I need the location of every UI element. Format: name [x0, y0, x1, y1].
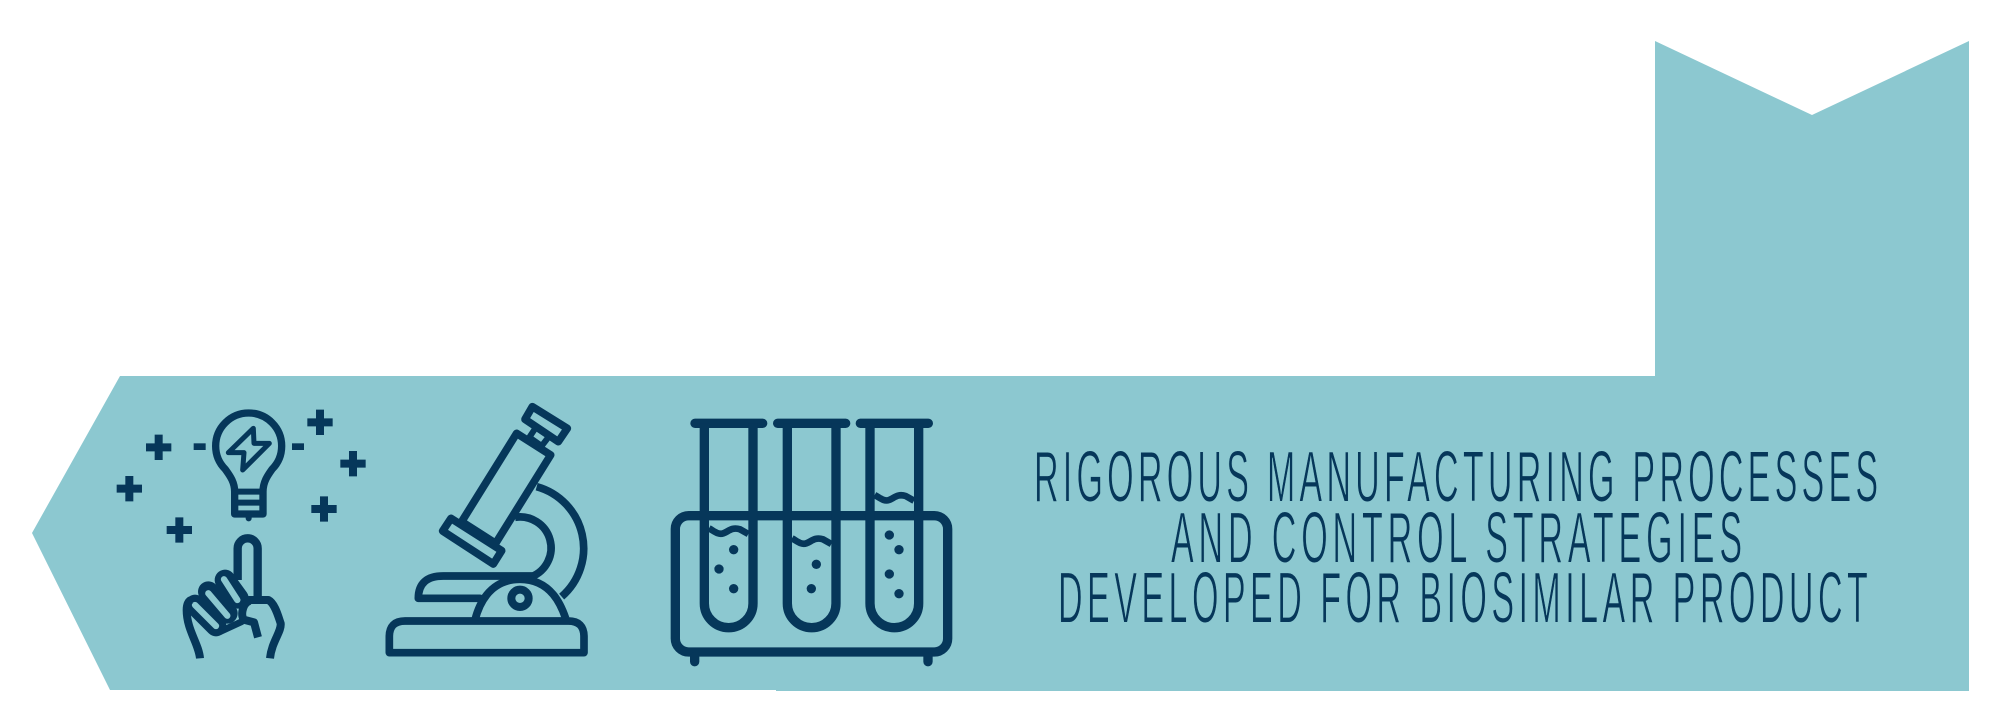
- icon: microscope: [389, 407, 584, 653]
- icon: test tubes in rack: [675, 423, 948, 662]
- icon: light bulb idea with hand: [117, 410, 366, 658]
- text block: main statement: [1034, 438, 1878, 639]
- text block: main statement: RIGOROUS MANUFACTURING PROCESSES: [1034, 438, 1878, 518]
- text block: main statement: DEVELOPED FOR BIOSIMILAR PRODUCT: [1058, 559, 1868, 639]
- text block: main statement: AND CONTROL STRATEGIES: [1171, 499, 1742, 579]
